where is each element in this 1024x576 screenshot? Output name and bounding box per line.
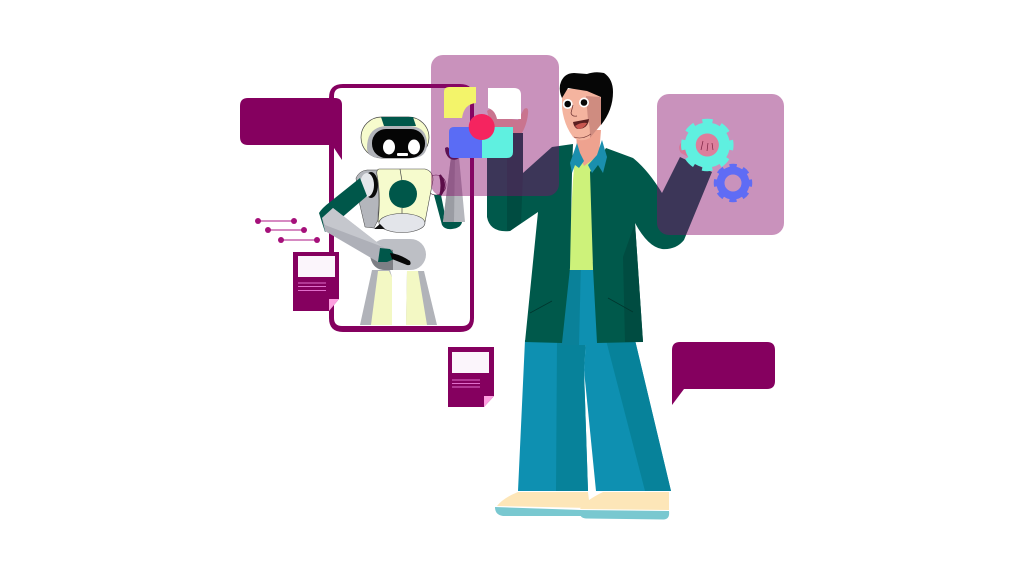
connector lines [255, 218, 320, 243]
speech bubble left [240, 98, 342, 160]
jacket [487, 133, 712, 343]
card: yellow [444, 87, 476, 118]
document icon left [293, 252, 339, 311]
hand left [487, 108, 528, 133]
panel: top centre [431, 55, 559, 196]
large gear [684, 122, 731, 168]
speech bubble right [672, 342, 775, 405]
card: blue [449, 127, 482, 158]
small gear [716, 166, 750, 200]
puzzle cards [444, 87, 521, 158]
panel: right [657, 94, 784, 235]
document icon bottom [448, 347, 494, 407]
collar [570, 140, 607, 173]
robot torso [356, 169, 433, 232]
hand right [679, 140, 698, 159]
circle: red [469, 114, 495, 140]
shoes [495, 492, 669, 520]
card: white [488, 88, 521, 119]
phone frame [329, 84, 474, 332]
robot legs [360, 270, 437, 325]
robot hips [370, 239, 426, 270]
card: cyan [482, 127, 513, 158]
neck [576, 130, 601, 166]
shirt [568, 156, 597, 270]
trousers [518, 262, 671, 491]
robot far arm [426, 147, 465, 229]
robot [319, 117, 465, 325]
head [560, 72, 613, 140]
person [487, 72, 712, 519]
robot near arm [319, 172, 411, 265]
robot head [361, 117, 429, 158]
